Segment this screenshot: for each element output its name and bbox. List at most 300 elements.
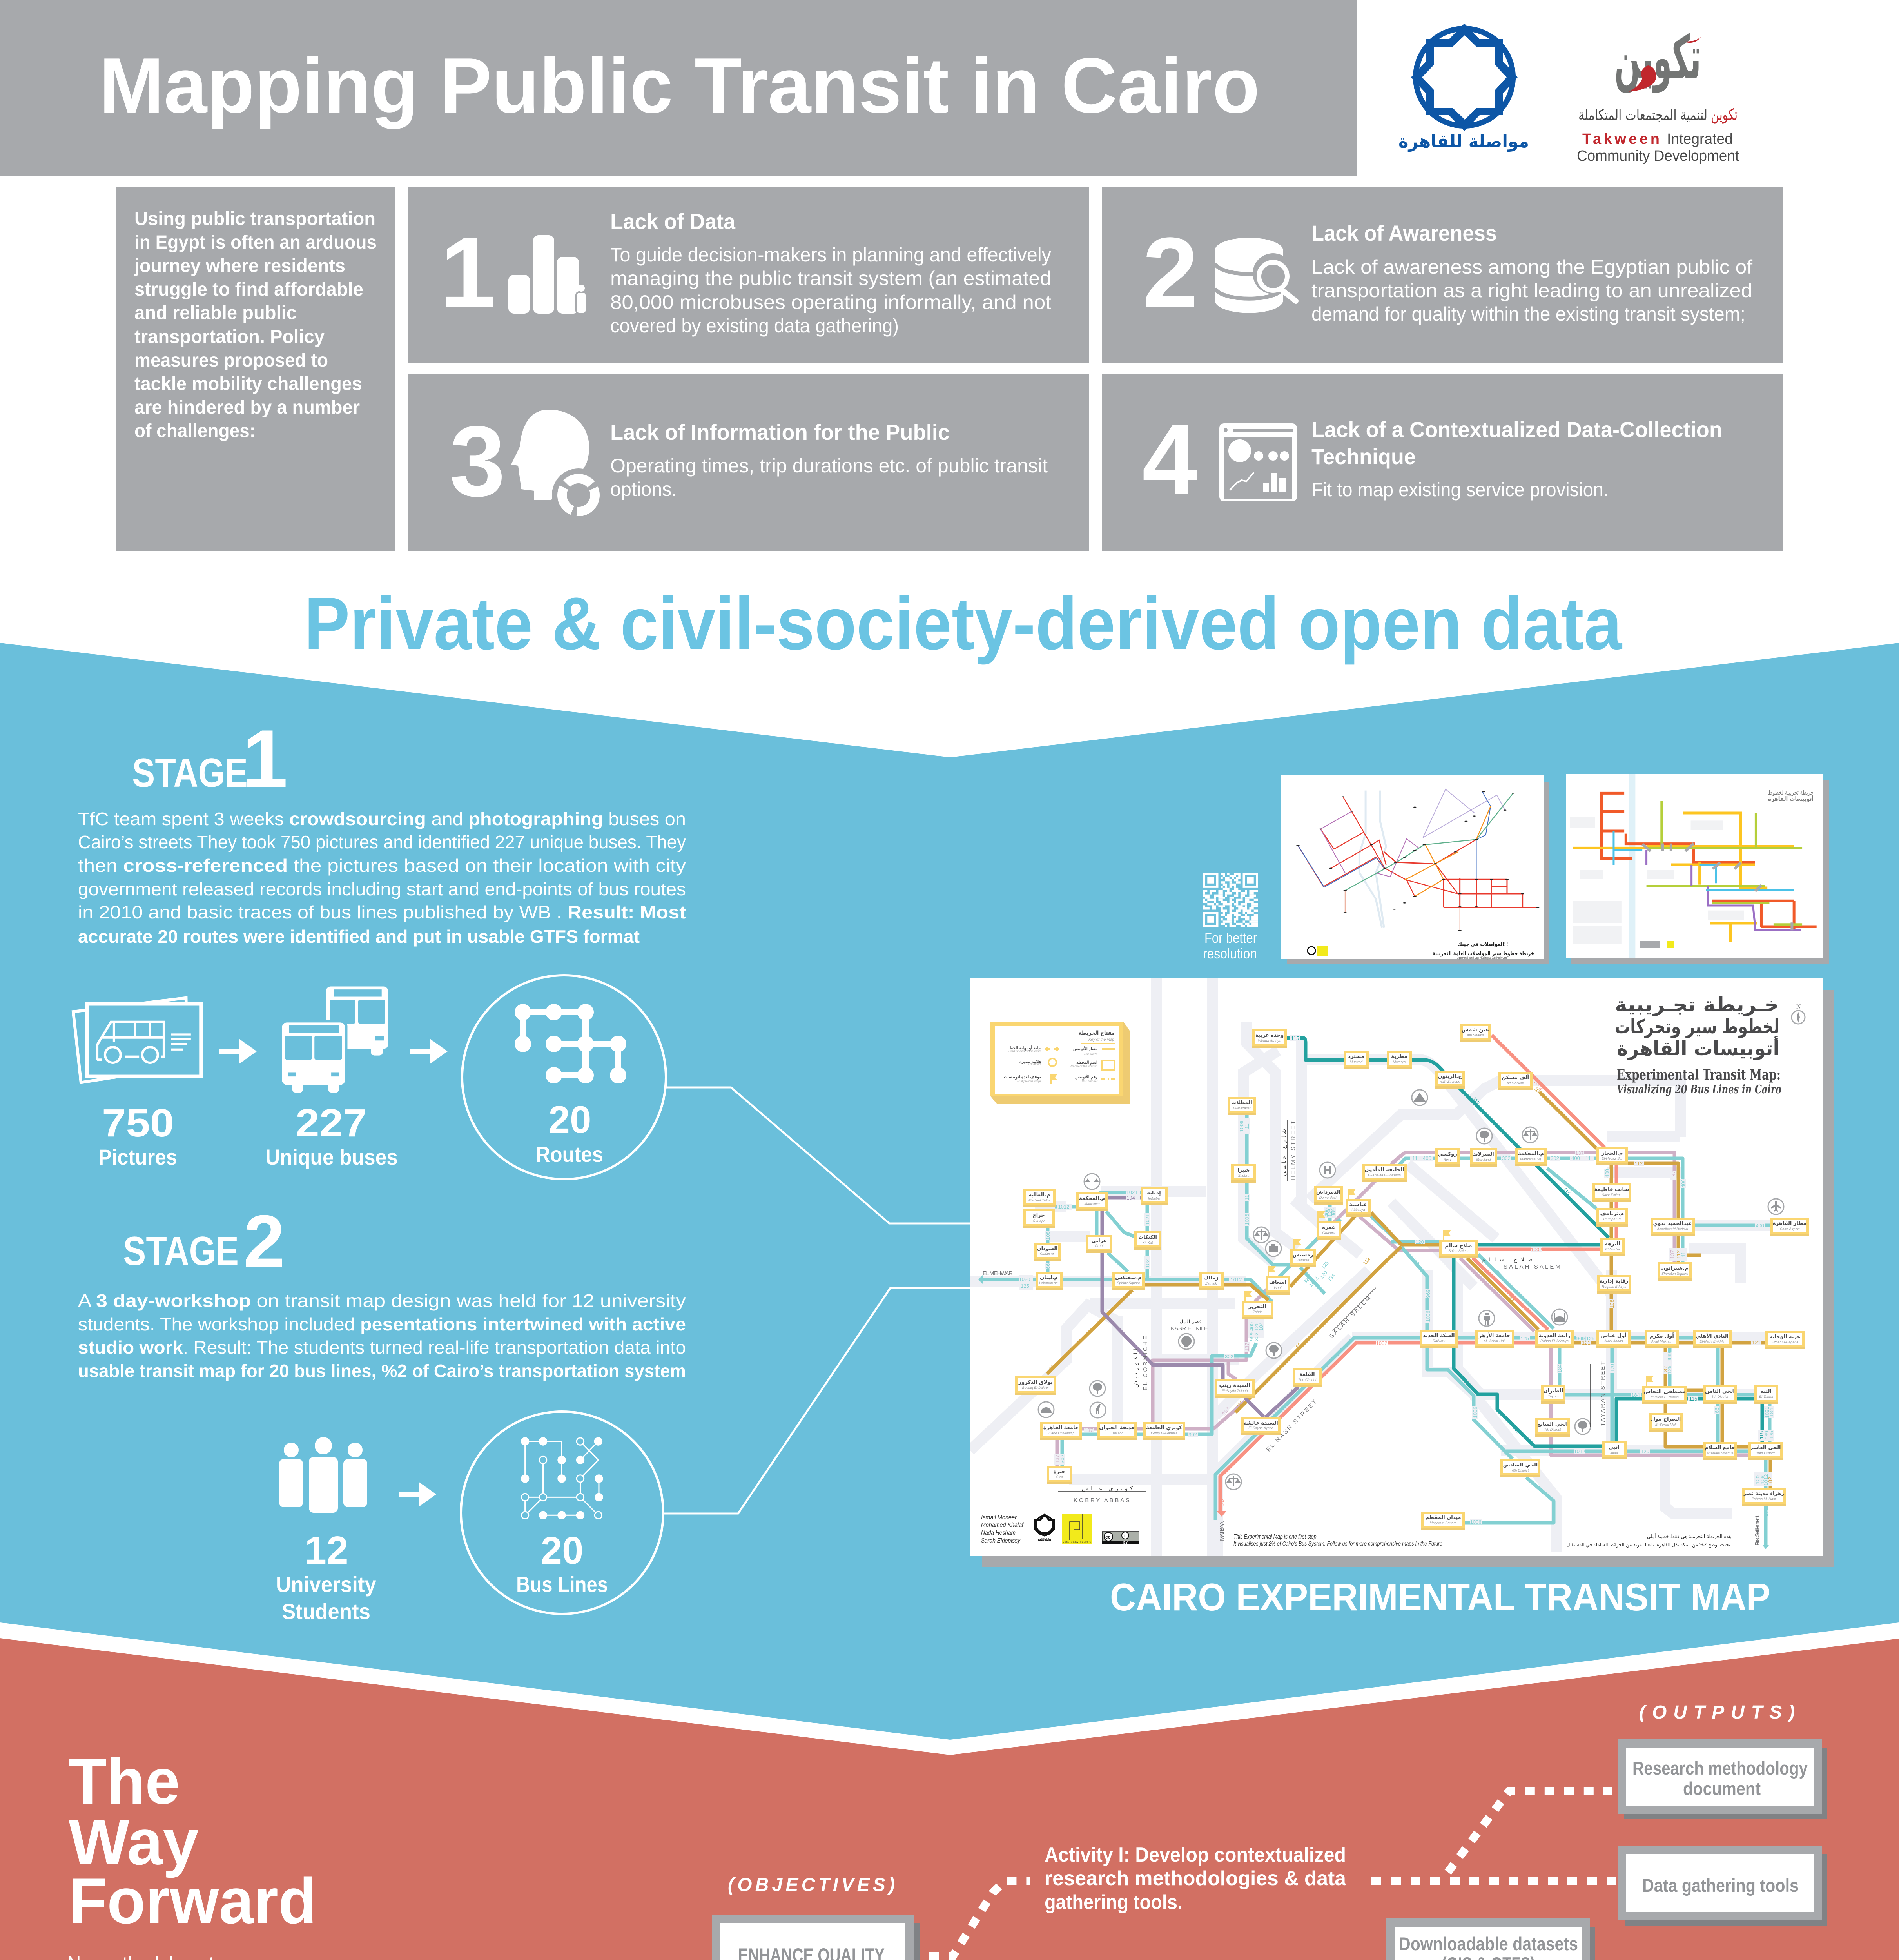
box: objective enhance quality of research — [712, 1915, 920, 1960]
map stations: Giza — [1056, 1475, 1063, 1479]
map landmark icons — [1038, 1011, 1805, 1490]
map stations: Shobra — [1238, 1174, 1250, 1178]
panel: challenge 1 lack of data: To guide decision-makers in planning and effectively — [610, 244, 1051, 266]
map stations: الخليفة المأمون — [1364, 1166, 1404, 1173]
map stations: زمالك — [1204, 1275, 1219, 1281]
map stations: م.الطلبة — [1029, 1192, 1050, 1198]
logo: Takween: تكوين — [1614, 23, 1701, 93]
heading: objectives: (OBJECTIVES) — [728, 1875, 895, 1895]
map stations: إمبابة — [1147, 1190, 1161, 1196]
map vertical bus numbers: 1002 — [1219, 1498, 1225, 1509]
map stations: الطيران — [1544, 1388, 1563, 1394]
map stations: عين شمس — [1462, 1027, 1489, 1033]
map route lines — [982, 1035, 1770, 1546]
map title: لخطوط سير وتحركات — [1615, 1015, 1779, 1038]
map street names: TAYARAN STREET — [1600, 1360, 1606, 1426]
circle: 20 routes: 20 — [548, 1098, 591, 1141]
panel: challenge 3 lack of information: Lack of Information for the Public — [610, 420, 950, 445]
map stations: Awel Makram — [1651, 1339, 1673, 1343]
panel: challenge 3 lack of information — [408, 374, 1089, 551]
icon: photographs of a bus — [73, 998, 201, 1082]
map vertical bus numbers: 400 — [1604, 1169, 1610, 1178]
panel: introduction — [116, 187, 395, 551]
thumbnail map: colourful bus network: أتوبيسات القاهرة — [1768, 795, 1814, 802]
map legend: بداية أو نهاية الخط — [1009, 1045, 1041, 1051]
map street names: MATBAA — [1219, 1520, 1225, 1541]
stat: 227 unique buses: Unique buses — [265, 1145, 398, 1169]
map stations: النزهه — [1605, 1241, 1620, 1247]
map legend: Multiple bus stops — [1017, 1080, 1041, 1083]
map stations: Al salam Mosque — [1706, 1451, 1734, 1455]
map stations: Lebanon sq. — [1039, 1281, 1059, 1285]
stage 1 text: accurate 20 routes were identified and put in usable GTFS format — [78, 926, 640, 947]
heading: the way forward — [69, 1745, 317, 1937]
map Arabic street names: صلاح سالم — [1482, 1257, 1533, 1263]
map vertical bus numbers: 1006 — [1425, 1311, 1431, 1322]
map street names: EL CORNICHE — [1142, 1335, 1149, 1390]
map vertical bus numbers: 137 — [1054, 1455, 1060, 1463]
map stations: شبرا — [1238, 1167, 1250, 1173]
thumbnail map: colourful bus network — [1566, 774, 1829, 964]
map stations: Zamalk — [1205, 1281, 1217, 1285]
map title: Experimental Transit Map: — [1617, 1067, 1781, 1083]
map stations: Rabaa El-Adawya — [1540, 1339, 1569, 1343]
map vertical bus numbers: 1012 — [1763, 1474, 1769, 1485]
text: activity 1 — [1045, 1844, 1346, 1914]
map stations: Alf Maskan — [1506, 1081, 1524, 1085]
map Arabic street names — [1058, 1120, 1591, 1492]
map Arabic street names: الكورنيش — [1133, 1348, 1139, 1388]
panel: introduction: transportation. Policy — [134, 327, 325, 347]
map stations: Abdelhamid Badawi — [1656, 1227, 1689, 1231]
map stations: Reqaba Edarya — [1602, 1285, 1626, 1289]
map street names: EL NASR STREET — [1265, 1397, 1319, 1453]
map vertical bus numbers: 137 — [1670, 1171, 1676, 1180]
stage 1 text: in 2010 and basic traces of bus lines published by WB . Result: Most — [78, 902, 686, 922]
map legend: موقف لعدة اتوبيسات — [1004, 1074, 1041, 1080]
map stations: م.المحكمة — [1518, 1151, 1544, 1157]
map vertical bus numbers: 108 — [1759, 1475, 1765, 1484]
map diagonal bus numbers: 1012 — [1409, 1254, 1420, 1267]
map stations: 10th District — [1756, 1451, 1775, 1455]
map street names: SALAH SALEM — [1328, 1294, 1373, 1340]
map stations: Roxy — [1444, 1158, 1452, 1161]
map stations: Sudan st. — [1040, 1252, 1055, 1256]
map stations: مطرية — [1391, 1054, 1407, 1060]
stat: 12 university students — [276, 1528, 376, 1624]
map title: Visualizing 20 Bus Lines in Cairo — [1617, 1083, 1781, 1096]
map bus number labels: 1021 — [1126, 1189, 1137, 1195]
map stations: السكة الحديد — [1423, 1333, 1455, 1339]
map stations: أول عباس — [1601, 1332, 1627, 1339]
map diagonal bus numbers: 82 — [1507, 1295, 1515, 1303]
circle: 20 bus lines: 20 — [540, 1529, 584, 1572]
stage 2 text — [78, 1290, 686, 1381]
heading: the way forward: The — [69, 1745, 180, 1817]
map stations: Matarya — [1393, 1060, 1406, 1064]
map diagonal bus numbers: 82 — [1295, 1341, 1303, 1349]
panel: challenge 4 lack of technique: 4 — [1142, 403, 1198, 515]
map stations: الحي السابع — [1537, 1421, 1568, 1427]
panel: challenge 2 lack of awareness: Lack of Awareness — [1311, 221, 1497, 245]
map vertical bus numbers: 969 — [1667, 1352, 1672, 1361]
stage 2 text: studio work. Result: The students turned real-life transportation data into — [78, 1337, 686, 1357]
map stations: Meryland — [1476, 1158, 1491, 1161]
map logos: i — [1124, 1533, 1125, 1539]
map legend: علامة مميزة — [1019, 1059, 1041, 1064]
map vertical bus numbers: 1006 — [1239, 1121, 1244, 1132]
map stations: السيدة عائشة — [1244, 1420, 1278, 1426]
icon: thin route network — [521, 1437, 603, 1519]
map legend: مفتاح الخريطة — [1079, 1029, 1115, 1036]
stage 1 heading: STAGE — [132, 750, 248, 796]
logo: Takween: Takween — [1582, 131, 1660, 147]
map stations: Demerdash — [1319, 1196, 1337, 1200]
map footnote arabic: بحيث توضح 2% من شبكة نقل القاهرة. تابعنا لمزيد من الخرائط الشاملة في المستقبل. — [1567, 1542, 1732, 1548]
map bus number labels: 11 — [1412, 1155, 1418, 1161]
thumbnail map: red bus network: المواصلات في جيبك!! — [1458, 941, 1508, 947]
map stations: م.شيراتون — [1661, 1265, 1689, 1271]
map stations: Mahkama — [1084, 1202, 1100, 1206]
map stations: الدمرداش — [1316, 1189, 1340, 1195]
map stations: التبه — [1761, 1388, 1772, 1394]
map legend: رقم الأتوبيس — [1075, 1074, 1097, 1080]
map logos: مواصلة للقاهرة — [1038, 1538, 1051, 1542]
box: output data gathering tools: Data gathering tools — [1642, 1875, 1799, 1896]
map legend: Key of the map — [1088, 1038, 1114, 1042]
stage 2 heading — [123, 1200, 285, 1283]
map stations: Salah Salem — [1448, 1249, 1469, 1253]
map vertical bus numbers: 400 — [1324, 1208, 1329, 1217]
map title — [1615, 993, 1781, 1096]
map vertical bus numbers: 125 — [1667, 1365, 1672, 1374]
map footnote english — [1233, 1534, 1442, 1547]
map bus number labels: 400 — [1571, 1155, 1580, 1161]
map bus number labels: 115 — [1689, 1396, 1697, 1402]
panel: challenge 3 lack of information: options. — [610, 478, 677, 500]
logo: Takween: لتنمية المجتمعات المتكاملة — [1578, 106, 1707, 123]
map stations: وحده عربية — [1255, 1033, 1284, 1038]
panel: challenge 2 lack of awareness: transportation as a right leading to an unrealized — [1311, 279, 1752, 301]
map vertical bus numbers: 137 — [1669, 1250, 1675, 1259]
stage 2 text: students. The workshop included pesentations intertwined with active — [78, 1314, 686, 1334]
map stations: El-Nady El-Ahly — [1699, 1339, 1725, 1343]
stage 1 text: government released records including start and end-points of bus routes — [78, 879, 686, 899]
map stations: Ain Shams — [1466, 1033, 1484, 1037]
map diagonal bus numbers: 112 — [1235, 1399, 1245, 1409]
map stations: القلعة — [1299, 1372, 1315, 1377]
map stations: AL-Azhar Uni. — [1483, 1339, 1505, 1343]
logo: Takween: تكوين — [1711, 106, 1738, 124]
map vertical bus numbers: 184 — [1768, 1408, 1774, 1417]
map stations: الحي العاشر — [1750, 1445, 1781, 1451]
map bus number labels: 1006 — [1470, 1519, 1481, 1525]
stage 2 text: usable transit map for 20 bus lines, %2 of Cairo’s transportation system — [78, 1361, 686, 1381]
map bus number labels: 302 — [1225, 1354, 1233, 1359]
map stations: Imbaba — [1148, 1196, 1160, 1200]
map Arabic street names: شارع حلمي — [1281, 1129, 1287, 1176]
map stations: عباسية — [1349, 1202, 1367, 1208]
thumbnail map: colourful bus network: خريطة تجريبية لخطوط — [1768, 789, 1814, 797]
map vertical bus numbers: 66 — [1714, 1408, 1720, 1413]
caption: for better resolution: For better — [1204, 930, 1257, 946]
stage 1 heading — [132, 713, 288, 805]
stat: 750 pictures — [98, 1101, 177, 1169]
map vertical bus numbers: 125 — [1253, 1322, 1259, 1331]
map diagonal bus numbers: 137 — [1221, 1406, 1231, 1416]
map stations: Boulaq El-Dakror — [1022, 1386, 1049, 1390]
panel: introduction: tackle mobility challenges — [134, 374, 362, 394]
map bus number labels: 1020 — [1019, 1276, 1030, 1282]
map diagonal bus numbers: 120 — [1319, 1270, 1328, 1280]
map bus number labels: 400 — [1756, 1223, 1764, 1229]
map stations: جامع السلام — [1705, 1445, 1735, 1451]
map street names: HELMY STREET — [1290, 1120, 1297, 1180]
map stations: Abbasya — [1351, 1208, 1365, 1212]
map stations: Tahrir — [1253, 1310, 1262, 1314]
map stations: Ramses — [1296, 1258, 1310, 1262]
map vertical bus numbers — [1045, 1118, 1774, 1516]
map vertical bus numbers: 969 — [1331, 1208, 1337, 1217]
panel: blue stages background — [0, 643, 1899, 1740]
panel: challenge 1 lack of data: 80,000 microbuses operating informally, and not — [610, 291, 1051, 313]
panel: challenge 4 lack of technique: Lack of a Contextualized Data-Collection — [1311, 417, 1722, 442]
map vertical bus numbers: 1021 — [1144, 1214, 1150, 1225]
icon: data dashboard — [1219, 423, 1297, 501]
map stations: مطار القاهرة — [1773, 1221, 1806, 1227]
map stations: السيدة زينب — [1219, 1383, 1250, 1388]
map diagonal bus numbers: 194 — [1286, 1388, 1295, 1398]
map stations: The Citadel — [1298, 1378, 1317, 1382]
thumbnail map: red bus network — [1281, 775, 1549, 964]
arrow: connector from routes to map — [666, 1087, 970, 1223]
main map: Cairo experimental transit map — [970, 978, 1834, 1567]
map stations: السراج مول — [1651, 1416, 1681, 1422]
box: output research methodology document — [1618, 1739, 1827, 1819]
map street names — [983, 1120, 1761, 1546]
map bus number labels: 125 — [1021, 1283, 1029, 1289]
map street names: KASR EL NILE — [1171, 1325, 1209, 1332]
map stations: Mustrod — [1350, 1060, 1363, 1064]
icon: three students — [279, 1437, 367, 1513]
icon: bar chart with person — [508, 235, 586, 314]
map vertical bus numbers: 302 — [1059, 1455, 1065, 1463]
map stations: Kobry El-Gama'a — [1151, 1431, 1177, 1435]
map bus number labels: 137 — [1085, 1427, 1093, 1433]
map stations: رمسيس — [1293, 1252, 1313, 1258]
map stations: مصطفى النحاس — [1643, 1389, 1686, 1395]
map vertical bus numbers: 112 — [1676, 1250, 1681, 1258]
map stations: El-Khalifa El-Ma'mun — [1368, 1173, 1401, 1177]
map diagonal bus numbers: 1012 — [1308, 1275, 1320, 1288]
map vertical bus numbers: 302 — [1253, 1332, 1259, 1341]
map logos: BY — [1123, 1541, 1128, 1544]
map stations: الميرلاند — [1473, 1151, 1494, 1157]
map stations: جامعة الأزهر — [1478, 1332, 1510, 1339]
map stations: Saint Fatima — [1602, 1193, 1621, 1197]
caption: for better resolution — [1203, 930, 1257, 962]
map vertical bus numbers: 11 — [1244, 1195, 1250, 1200]
map credits: Mohamed Khalaf — [981, 1522, 1024, 1528]
map vertical bus numbers: 969 — [1249, 1332, 1255, 1341]
panel: challenge 1 lack of data: Lack of Data — [610, 209, 736, 234]
caption: for better resolution: resolution — [1203, 946, 1257, 962]
map stations: كوبري الجامعة — [1146, 1425, 1182, 1431]
map stations: التحرير — [1248, 1304, 1266, 1310]
map stations: عرابي — [1091, 1238, 1107, 1244]
map stations: السودان — [1037, 1246, 1057, 1252]
map Arabic street names: قصر النيل — [1180, 1319, 1201, 1324]
stage 1 text — [78, 809, 686, 947]
map title: خـريطة تجـريبية — [1615, 993, 1779, 1016]
map stations: El-Nozha — [1605, 1247, 1620, 1251]
stage 2 heading: STAGE — [123, 1229, 239, 1274]
map stations: اسعاف — [1269, 1279, 1286, 1285]
panel: introduction: in Egypt is often an arduous — [134, 232, 377, 253]
map stations: م.سفنكس — [1115, 1275, 1142, 1281]
map legend: Landmark — [1028, 1062, 1042, 1066]
map stations: أول مكرم — [1650, 1332, 1674, 1339]
map bus number labels: 1012 — [1058, 1204, 1069, 1210]
map legend: مسار الأتوبيس — [1073, 1046, 1097, 1051]
logo: Transport for Cairo: مواصلة للقاهرة — [1398, 131, 1529, 152]
map credits: Sarah Eldepissy — [981, 1537, 1021, 1544]
panel: challenge 1 lack of data: covered by existing data gathering) — [610, 315, 899, 337]
heading: the way forward: Way — [69, 1806, 199, 1878]
dotted connectors: objectives to activities to outputs — [921, 1791, 1619, 1960]
map stations: El-Sayda Zeinab — [1222, 1389, 1248, 1393]
heading: Cairo experimental transit map: CAIRO EXPERIMENTAL TRANSIT MAP — [1110, 1575, 1770, 1619]
stage 1 heading: 1 — [242, 713, 288, 805]
map footnote english: It visualises just 2% of Cairo's Bus System. Follow us for more comprehensive maps in the Future — [1233, 1541, 1442, 1547]
panel: introduction: struggle to find affordable — [134, 279, 363, 300]
header banner — [0, 0, 1357, 176]
stage 2 text: A 3 day-workshop on transit map design was held for 12 university — [78, 1290, 686, 1311]
map logos: cc — [1105, 1534, 1111, 1540]
map footnote arabic — [1567, 1533, 1733, 1548]
map stations: Mahkama Sq. — [1520, 1157, 1542, 1161]
thumbnail map: red bus network: خريطة خطوط سير المواصلات العامة التجريبية — [1433, 950, 1534, 957]
icon: database with magnifier — [1215, 238, 1296, 313]
map bus number labels: 120 — [1641, 1448, 1649, 1454]
map vertical bus numbers: 115 — [1759, 1431, 1765, 1439]
map bus number labels: 11 — [1585, 1155, 1591, 1161]
map vertical bus numbers: 137 — [1244, 1343, 1250, 1351]
map bus number labels: 302 — [1188, 1432, 1197, 1437]
map stations: غمره — [1322, 1225, 1335, 1230]
stat: 750 pictures: Pictures — [98, 1145, 177, 1169]
panel: introduction: journey where residents — [134, 256, 345, 276]
map stations: H.El-Zaytoun — [1440, 1080, 1460, 1083]
map vertical bus numbers: 125 — [1327, 1208, 1333, 1217]
map diagonal bus numbers: 121 — [1046, 1363, 1056, 1374]
map title: أتوبيسات القاهرة — [1617, 1036, 1779, 1060]
map stations: عبدالحميد بدوي — [1653, 1221, 1692, 1227]
map vertical bus numbers: 400 — [1249, 1322, 1255, 1331]
panel: challenge 2 lack of awareness — [1102, 187, 1783, 363]
map stations: م.الحجاز — [1601, 1151, 1623, 1156]
map bus number labels: 125 — [1520, 1336, 1529, 1341]
text: activity 1: Activity I: Develop contextualized — [1045, 1844, 1346, 1866]
map bus number labels: 194 — [1126, 1195, 1135, 1201]
map stations: El-Serag Mall — [1655, 1423, 1677, 1426]
map vertical bus numbers: 11 — [1244, 1123, 1250, 1129]
map stations: Moqatam Square — [1429, 1521, 1457, 1525]
map vertical bus numbers: 1012 — [1763, 1505, 1769, 1516]
title: Mapping Public Transit in Cairo — [99, 42, 1260, 129]
heading: outputs: (OUTPUTS) — [1639, 1702, 1795, 1723]
map bus number labels: 121 — [1582, 1340, 1591, 1346]
map footnote arabic: هذه الخريطة التجريبية هي فقط خطوة أولى، — [1647, 1533, 1733, 1540]
map vertical bus numbers: 108 — [1609, 1299, 1615, 1308]
text: activity 1: research methodologies & data — [1045, 1867, 1346, 1890]
map stations: مسترد — [1348, 1054, 1364, 1060]
map bus number labels: 137 — [1575, 1150, 1584, 1156]
map vertical bus numbers: 82 — [1767, 1477, 1773, 1483]
icon: two buses — [279, 987, 388, 1093]
map stations: رقابة إدارية — [1600, 1278, 1629, 1284]
map stations: El-Hegaz Sq. — [1602, 1156, 1623, 1160]
map stations: حديقة الحيوان — [1099, 1425, 1135, 1431]
panel: red way forward background — [0, 1638, 1899, 1960]
map diagonal bus numbers: 125 — [1320, 1260, 1330, 1270]
map stations: روكسي — [1438, 1151, 1457, 1157]
stat: 227 unique buses — [265, 1101, 398, 1169]
text: activity 1: gathering tools. — [1045, 1891, 1183, 1914]
panel: challenge 4 lack of technique: Fit to map existing service provision. — [1311, 479, 1609, 501]
map legend: اسم المحطة — [1076, 1060, 1097, 1065]
map bus number labels: 1012 — [1231, 1277, 1242, 1283]
circle: 20 routes — [462, 975, 666, 1179]
map diagonal bus numbers: 184 — [1326, 1272, 1336, 1283]
icon: route network — [515, 1004, 626, 1083]
map street names: SALAH SALEM — [1504, 1263, 1562, 1270]
circle: 20 routes: Routes — [536, 1142, 603, 1167]
map stations: المظلات — [1231, 1100, 1252, 1106]
stat: 227 unique buses: 227 — [296, 1101, 367, 1145]
map diagonal bus numbers: 82 — [1302, 1277, 1310, 1285]
map bus number labels: 969|125 — [1576, 1336, 1594, 1341]
arrow: pictures to buses — [219, 1039, 257, 1064]
map vertical bus numbers: 1006 — [1244, 1214, 1250, 1225]
panel: challenge 3 lack of information: Operating times, trip durations etc. of public transit — [610, 455, 1048, 477]
map stations: م.المحكمة — [1079, 1196, 1105, 1201]
map credits: Nada Hesham — [981, 1530, 1016, 1536]
map diagonal bus numbers — [1046, 1036, 1572, 1435]
map diagonal bus numbers: 115 — [1471, 1096, 1481, 1106]
map Arabic street names: كوبري عباس — [1082, 1486, 1133, 1492]
map stations: جامعة القاهرة — [1043, 1425, 1079, 1431]
map diagonal bus numbers: 115 — [1512, 1425, 1522, 1435]
map diagonal bus numbers: 1002 — [1493, 1036, 1504, 1049]
map stations: Mustafa El-Nahas — [1651, 1395, 1679, 1399]
map stations: Awel Abbas — [1604, 1339, 1623, 1343]
map bus number labels: 1012 — [1574, 1448, 1585, 1454]
box: output research methodology document: document — [1683, 1778, 1761, 1799]
stat: 12 university students: Students — [282, 1599, 370, 1624]
map legend: Bus number — [1082, 1080, 1097, 1083]
panel: introduction: are hindered by a number — [134, 397, 360, 418]
map legend: Bus route — [1084, 1053, 1097, 1056]
map diagonal bus numbers: 120 — [1523, 1298, 1533, 1308]
map legend — [990, 1022, 1130, 1104]
map stations: 7th District — [1544, 1428, 1561, 1432]
panel: introduction: Using public transportation — [134, 209, 375, 229]
map stations: Railway — [1433, 1339, 1445, 1343]
map stations: Madinet Talba — [1028, 1198, 1050, 1202]
panel: challenge 4 lack of technique: Technique — [1311, 444, 1416, 469]
panel: challenge 1 lack of data: managing the public transit system (an estimated — [610, 267, 1051, 289]
